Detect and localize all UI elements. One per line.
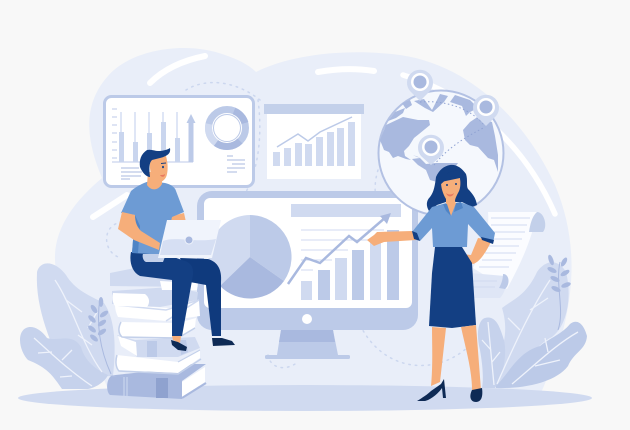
stack of books	[107, 268, 206, 399]
dashboard small lines	[121, 156, 245, 179]
book two	[112, 287, 198, 307]
trend arrow	[288, 213, 391, 284]
left plants	[20, 263, 115, 389]
woman fringe	[440, 171, 463, 190]
route lines	[420, 102, 485, 165]
paper scroll	[470, 212, 545, 298]
dashboard panel	[104, 96, 254, 186]
dashboard bar columns	[119, 112, 196, 162]
ground ellipse	[18, 385, 592, 411]
man neck	[147, 172, 162, 189]
background blob	[55, 48, 572, 395]
man hair	[140, 148, 170, 177]
map pin: top	[407, 70, 433, 101]
book five	[117, 335, 200, 357]
pie chart	[208, 215, 292, 298]
laptop	[143, 220, 221, 262]
map pin: center	[418, 135, 444, 165]
monitor	[197, 191, 418, 359]
report trend line	[277, 117, 352, 147]
man shoe left	[171, 340, 187, 351]
dotted orbits	[107, 83, 470, 368]
man back leg	[180, 258, 221, 336]
woman shoes	[417, 379, 482, 402]
map pin: right	[473, 95, 499, 126]
report panel with line chart	[264, 104, 364, 179]
white highlight strokes	[93, 56, 555, 217]
axis ticks	[112, 109, 193, 162]
report bars	[273, 122, 355, 166]
t-shirt	[121, 181, 184, 255]
man sitting with laptop	[118, 148, 235, 351]
donut chart	[208, 110, 246, 147]
woman neck and face	[441, 178, 460, 216]
top book	[110, 268, 198, 290]
woman hair	[427, 165, 477, 211]
woman presenting	[367, 165, 495, 402]
monitor header bar	[291, 204, 401, 217]
woman legs	[431, 325, 481, 390]
woman left arm	[367, 231, 416, 246]
book three	[115, 300, 200, 321]
right sprig	[546, 254, 571, 330]
left sprig	[87, 297, 111, 374]
globe	[378, 90, 504, 216]
man head	[150, 156, 168, 182]
man far arm	[170, 213, 186, 222]
man front leg	[130, 252, 193, 336]
monitor stand	[265, 330, 350, 359]
right plants	[478, 254, 587, 388]
monitor bar chart	[301, 230, 399, 300]
man ankle	[172, 336, 181, 343]
book four	[119, 318, 196, 338]
bottom book	[107, 364, 206, 399]
continents	[380, 94, 498, 182]
blouse	[412, 202, 495, 247]
man shoe right	[212, 338, 235, 346]
skirt	[429, 247, 476, 328]
man near arm	[118, 212, 160, 250]
book six	[116, 350, 201, 374]
woman right arm	[460, 238, 492, 264]
